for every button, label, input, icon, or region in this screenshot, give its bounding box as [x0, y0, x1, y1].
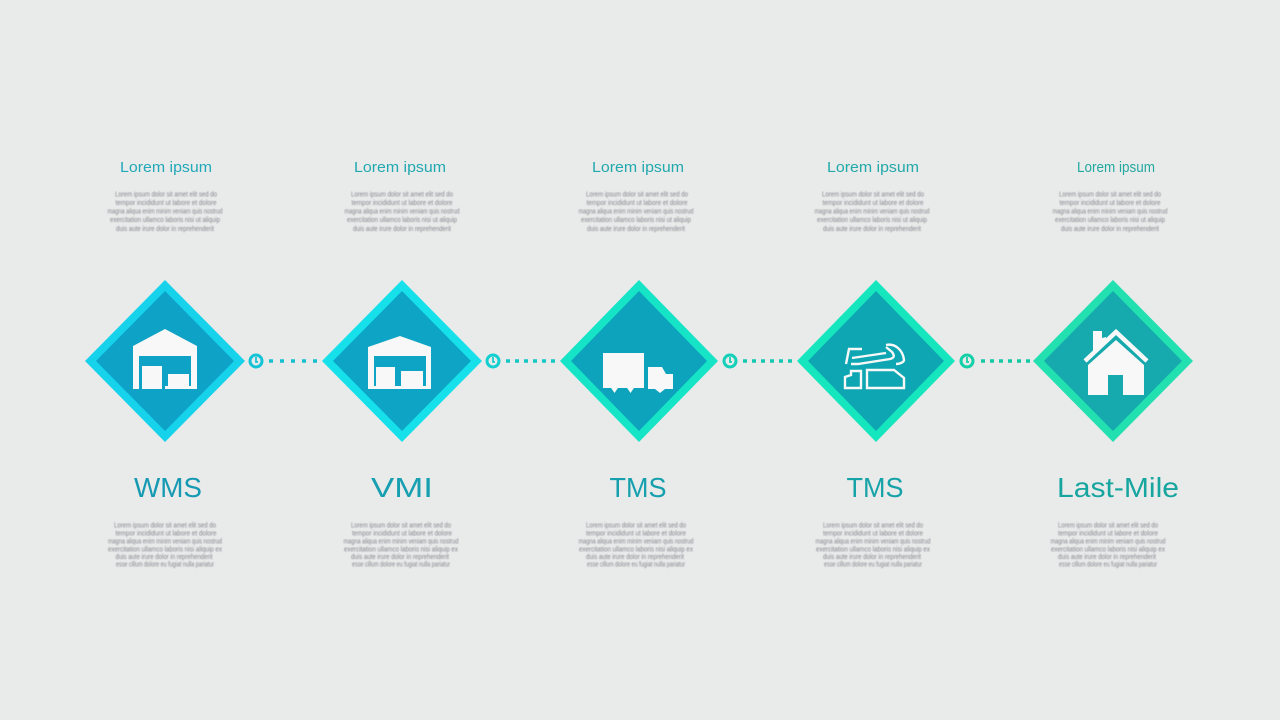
- text block: step 4 bottom: esse cillum dolore eu fugiat nulla pariatur: [824, 560, 922, 568]
- text block: step 1 top: tempor incididunt ut labore et dolore: [116, 198, 216, 207]
- text block: step 4 bottom: Lorem ipsum dolor sit amet elit sed do: [823, 520, 923, 530]
- text block: step 2 top: Lorem ipsum dolor sit amet elit sed do: [351, 190, 453, 198]
- text block: step 5 bottom: exercitation ullamco laboris nisi aliquip ex: [1051, 544, 1165, 554]
- text block: step 1 top: Lorem ipsum dolor sit amet elit sed do: [115, 190, 217, 198]
- text block: step 5 bottom: Lorem ipsum dolor sit amet elit sed do: [1058, 520, 1158, 530]
- heading: step 3: Lorem ipsum: [592, 159, 684, 176]
- text block: step 1 bottom: Lorem ipsum dolor sit amet elit sed do: [114, 520, 216, 530]
- text block: step 4 bottom: duis aute irure dolor in reprehenderit: [823, 552, 922, 561]
- text block: step 5 top: tempor incididunt ut labore et dolore: [1060, 198, 1160, 207]
- text block: step 5 bottom: magna aliqua enim minim veniam quis nostrud: [1050, 536, 1166, 546]
- heading: step 5: Lorem ipsum: [1077, 159, 1155, 176]
- text block: step 4 bottom: magna aliqua enim minim veniam quis nostrud: [816, 536, 930, 546]
- text block: step 3 top: Lorem ipsum dolor sit amet elit sed do: [586, 190, 688, 198]
- connector 4: [961, 355, 1031, 367]
- connector 3: [724, 355, 795, 367]
- text block: step 3 top: duis aute irure dolor in reprehenderit: [587, 224, 686, 233]
- text block: step 2 bottom: esse cillum dolore eu fugiat nulla pariatur: [352, 560, 450, 568]
- text block: step 3 bottom: duis aute irure dolor in reprehenderit: [586, 552, 685, 561]
- text block: step 1 bottom: duis aute irure dolor in reprehenderit: [116, 552, 213, 561]
- text block: step 3 top: magna aliqua enim minim veniam quis nostrud: [578, 206, 694, 216]
- text block: step 4 bottom: exercitation ullamco laboris nisi aliquip ex: [816, 544, 930, 554]
- panel: step 4 TMS: [797, 159, 955, 568]
- label: Last-Mile: Last-Mile: [1057, 472, 1179, 503]
- text block: step 5 bottom: [1050, 520, 1166, 568]
- text block: step 4 top: magna aliqua enim minim veniam quis nostrud: [814, 206, 930, 216]
- text block: step 2 top: [344, 190, 460, 233]
- text block: step 3 bottom: Lorem ipsum dolor sit amet elit sed do: [586, 520, 686, 530]
- text block: step 2 bottom: duis aute irure dolor in reprehenderit: [351, 552, 450, 561]
- text block: step 3 bottom: [578, 520, 694, 568]
- text block: step 2 bottom: tempor incididunt ut labore et dolore: [352, 528, 452, 538]
- text block: step 3 top: exercitation ullamco laboris nisi ut aliquip: [581, 215, 691, 224]
- panel: step 2 VMI: [322, 159, 482, 568]
- text block: step 4 top: duis aute irure dolor in reprehenderit: [823, 224, 922, 233]
- text block: step 1 bottom: exercitation ullamco laboris nisi aliquip ex: [108, 544, 222, 554]
- heading: step 1: Lorem ipsum: [120, 159, 212, 176]
- connector 2: [487, 355, 558, 367]
- text block: step 5 bottom: duis aute irure dolor in reprehenderit: [1058, 552, 1157, 561]
- text block: step 3 bottom: esse cillum dolore eu fugiat nulla pariatur: [587, 560, 685, 568]
- label: TMS: TMS: [610, 472, 666, 503]
- text block: step 2 top: exercitation ullamco laboris nisi ut aliquip: [347, 215, 457, 224]
- text block: step 1 bottom: tempor incididunt ut labore et dolore: [116, 528, 216, 538]
- text block: step 1 top: magna aliqua enim minim veniam quis nostrud: [108, 206, 222, 216]
- text block: step 5 top: Lorem ipsum dolor sit amet elit sed do: [1059, 190, 1161, 198]
- text block: step 3 top: tempor incididunt ut labore et dolore: [586, 198, 688, 207]
- text block: step 1 top: [108, 190, 222, 233]
- panel: step 1 WMS: [85, 159, 245, 568]
- heading: step 2: Lorem ipsum: [354, 159, 446, 176]
- text block: step 5 bottom: esse cillum dolore eu fugiat nulla pariatur: [1059, 560, 1157, 568]
- text block: step 5 bottom: tempor incididunt ut labore et dolore: [1058, 528, 1158, 538]
- text block: step 1 top: duis aute irure dolor in reprehenderit: [116, 224, 215, 233]
- text block: step 4 top: Lorem ipsum dolor sit amet elit sed do: [822, 190, 924, 198]
- text block: step 3 top: [578, 190, 694, 233]
- text block: step 2 top: magna aliqua enim minim veniam quis nostrud: [344, 206, 460, 216]
- text block: step 2 bottom: Lorem ipsum dolor sit amet elit sed do: [351, 520, 451, 530]
- text block: step 5 top: [1052, 190, 1168, 233]
- diamond icon: truck: [560, 280, 718, 442]
- text block: step 3 bottom: exercitation ullamco laboris nisi aliquip ex: [579, 544, 693, 554]
- text block: step 4 bottom: [816, 520, 930, 568]
- diamond icon: house: [1033, 280, 1193, 442]
- panel: step 3 TMS: [560, 159, 718, 568]
- text block: step 1 bottom: magna aliqua enim minim veniam quis nostrud: [108, 536, 222, 546]
- text block: step 1 bottom: esse cillum dolore eu fugiat nulla pariatur: [116, 560, 214, 568]
- text block: step 1 top: exercitation ullamco laboris nisi ut aliquip: [110, 215, 220, 224]
- connector 1: [250, 355, 318, 367]
- label: VMI: VMI: [371, 472, 433, 503]
- heading: step 4: Lorem ipsum: [827, 159, 919, 176]
- text block: step 3 bottom: magna aliqua enim minim veniam quis nostrud: [578, 536, 694, 546]
- text block: step 3 bottom: tempor incididunt ut labore et dolore: [586, 528, 686, 538]
- text block: step 2 bottom: exercitation ullamco laboris nisi aliquip ex: [344, 544, 458, 554]
- diamond icon: warehouse: [85, 280, 245, 442]
- diamond icon: warehouse: [322, 280, 482, 442]
- text block: step 5 top: exercitation ullamco laboris nisi ut aliquip: [1055, 215, 1165, 224]
- panel: step 5 Last-Mile: [1033, 159, 1193, 568]
- diamond icon: delivery outline: [797, 280, 955, 442]
- text block: step 4 top: tempor incididunt ut labore et dolore: [822, 198, 924, 207]
- text block: step 5 top: duis aute irure dolor in reprehenderit: [1061, 224, 1160, 233]
- text block: step 4 top: [814, 190, 930, 233]
- text block: step 2 top: duis aute irure dolor in reprehenderit: [353, 224, 452, 233]
- text block: step 5 top: magna aliqua enim minim veniam quis nostrud: [1052, 206, 1168, 216]
- text block: step 4 bottom: tempor incididunt ut labore et dolore: [823, 528, 923, 538]
- text block: step 2 bottom: magna aliqua enim minim veniam quis nostrud: [344, 536, 458, 546]
- text block: step 2 top: tempor incididunt ut labore et dolore: [352, 198, 452, 207]
- text block: step 1 bottom: [108, 520, 222, 568]
- text block: step 2 bottom: [344, 520, 458, 568]
- text block: step 4 top: exercitation ullamco laboris nisi ut aliquip: [817, 215, 927, 224]
- label: TMS: TMS: [846, 472, 904, 503]
- label: WMS: WMS: [134, 472, 202, 503]
